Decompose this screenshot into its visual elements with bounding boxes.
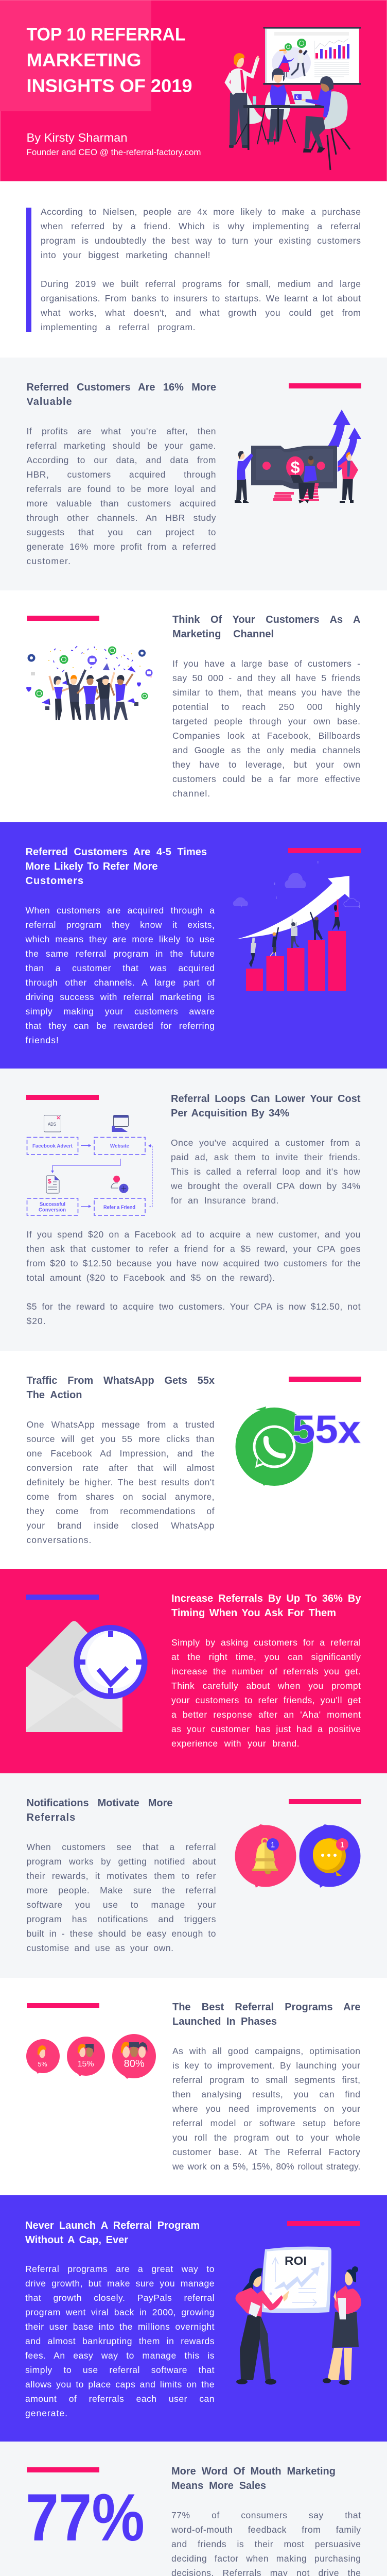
heading	[27, 1798, 173, 1823]
body text: conversations.	[27, 1535, 92, 1545]
body text: experience with your brand.	[171, 1738, 300, 1749]
icon: envelope with clock	[26, 1621, 148, 1732]
body text: referrals are found to be more loyal and	[27, 484, 216, 494]
body text: built in - these should be easy enough to	[27, 1928, 216, 1939]
body text	[27, 1842, 216, 1953]
illustration: team meeting in front of a presentation screen: €	[296, 95, 298, 100]
intro paragraph 2: During 2019 we built referral programs for small, medium and large	[41, 279, 361, 289]
body text: than a customer that was acquired	[26, 963, 215, 973]
heading: More Word Of Mouth Marketing	[171, 2466, 336, 2477]
accent bar	[287, 2221, 360, 2226]
body text: deciding factor when making purchasing	[171, 2553, 361, 2564]
body text: allows you to place caps and limits on the	[25, 2379, 215, 2389]
body text: Simply by asking customers for a referral	[171, 1637, 361, 1648]
body text: through other channels. An HBR study	[27, 513, 216, 523]
body text: you roll the program out to your whole	[172, 2132, 360, 2143]
heading: The Action	[27, 1389, 82, 1401]
stat: 77%: 77%	[26, 2480, 145, 2555]
body text: their user base into the millions overnight	[25, 2321, 215, 2332]
body text: word-of-mouth feedback from family	[171, 2524, 361, 2535]
body text	[25, 2264, 215, 2418]
accent bar	[26, 1595, 99, 1600]
panel: whatsapp 55x	[27, 1375, 361, 1545]
body text: say 50 000 - and they all have 5 friends	[172, 673, 360, 683]
body text	[171, 2510, 361, 2576]
body text: targeted people through your own base.	[172, 716, 360, 726]
chart: rollout phase circles 5% 15% 80%: 80%	[124, 2058, 145, 2070]
panel: 16% more valuable	[0, 358, 387, 590]
panel: launch in phases	[26, 2002, 360, 2172]
heading: The Best Referral Programs Are	[172, 2002, 360, 2013]
body text: If profits are what you're after, then	[27, 426, 216, 436]
worked example text	[27, 1229, 361, 1283]
body text: This is called a referral loop and it's how	[171, 1166, 360, 1177]
heading	[171, 1593, 361, 1619]
body text: As with all good campaigns, optimisation	[172, 2046, 360, 2056]
heading: Think Of Your Customers As A	[172, 614, 360, 625]
heading: Traffic From WhatsApp Gets 55x	[27, 1375, 215, 1386]
worked example text: then ask that customer to refer a friend for a $5 reward, your CPA goes	[27, 1244, 361, 1254]
chart: referral loop flow diagram: Conversion	[39, 1208, 66, 1213]
body text: HBR, customers acquired through	[27, 469, 216, 480]
intro paragraph 2: implementing a referral program.	[41, 322, 196, 332]
heading: Valuable	[27, 396, 73, 408]
body text: Once you've acquired a customer from a	[171, 1138, 360, 1148]
body text: paid ad, ask them to invite their friends.	[171, 1152, 360, 1162]
body text: friends!	[26, 1035, 59, 1045]
conclusion text	[27, 1301, 361, 1326]
chart: referral loop flow diagram: $	[48, 1178, 51, 1185]
body text	[27, 1419, 215, 1545]
body text: One WhatsApp message from a trusted	[27, 1419, 215, 1430]
body text: more valuable than customers acquired	[27, 498, 216, 509]
worked example text: total amount ($20 to Facebook and $5 on the reward).	[27, 1273, 275, 1283]
body text: simply making your customers aware	[26, 1006, 215, 1016]
body text: Referral programs are a great way to	[25, 2264, 215, 2274]
body text: fees. An easy way to manage this is	[25, 2350, 215, 2361]
conclusion text: $20.	[27, 1316, 46, 1326]
accent bar	[27, 2467, 99, 2472]
body text: for an Insurance brand.	[171, 1195, 279, 1206]
body text: a better response after an 'Aha' moment	[171, 1709, 361, 1720]
heading: Timing When You Ask For Them	[171, 1607, 336, 1619]
body text: potential to reach 250 000 highly	[172, 702, 360, 712]
body text: they come from recommendations of	[27, 1506, 215, 1516]
icon: whatsapp brush circle with 55x: 55x	[292, 1408, 361, 1452]
heading	[172, 2002, 360, 2027]
chart: rollout phase circles 5% 15% 80%: 15%	[78, 2060, 94, 2069]
panel: timing	[0, 1569, 387, 1773]
title and byline: By Kirsty Sharman	[27, 131, 128, 144]
intro paragraph 2	[41, 279, 361, 332]
accent bar	[289, 383, 361, 388]
panel: never launch without a cap	[0, 2195, 387, 2442]
body text: and Google as the only media channels	[172, 745, 360, 755]
heading: Launched In Phases	[172, 2016, 277, 2027]
body text: program has notifications and triggers	[27, 1914, 216, 1924]
chart: referral loop flow diagram: Refer a Friend	[103, 1205, 135, 1211]
heading	[27, 1375, 215, 1401]
panel: word of mouth	[0, 2442, 387, 2576]
body text: their rewards, it motivates them to refer	[27, 1871, 216, 1881]
body text: Companies look at Facebook, Billboards	[172, 731, 360, 741]
body text	[26, 905, 215, 1045]
body text: source will get you 55 more clicks than	[27, 1434, 215, 1444]
body text: customise and use as your own.	[27, 1943, 174, 1953]
accent bar	[27, 616, 99, 621]
panel: marketing channel	[26, 614, 360, 799]
body text: more people. Make sure the referral	[27, 1885, 216, 1895]
heading: Referred Customers Are 16% More	[27, 382, 216, 393]
title and byline: TOP 10 REFERRAL	[27, 24, 185, 44]
heading: Increase Referrals By Up To 36% By	[171, 1593, 361, 1604]
heading: Never Launch A Referral Program	[25, 2220, 200, 2231]
illustration: team meeting in front of a presentation screen	[224, 27, 361, 170]
body text: simply to use referral software that	[25, 2365, 215, 2375]
illustration: two women presenting ROI board: ROI	[285, 2254, 307, 2267]
heading: Marketing Channel	[172, 629, 274, 640]
body text: where you need improvements on your	[172, 2104, 360, 2114]
heading: Customers	[26, 875, 84, 887]
body text: we work on a 5%, 15%, 80% rollout strategy.	[172, 2161, 360, 2172]
body text	[172, 658, 360, 799]
chart: referral loop flow diagram: Successful	[40, 1201, 65, 1208]
intro paragraph 1: when referred by a friend. Which is why implementing a referral	[41, 221, 361, 231]
body text: channel.	[172, 788, 210, 799]
chart: rollout phase circles 5% 15% 80%: 5%	[38, 2061, 47, 2068]
body text: as your customer has just had a positive	[171, 1724, 361, 1734]
heading: Without A Cap, Ever	[25, 2234, 128, 2246]
heading: More Likely To Refer More	[26, 861, 157, 872]
accent bar	[289, 1799, 361, 1804]
worked example text: from $20 to $12.50 because you have now acquired two customers for the	[27, 1258, 361, 1268]
accent bar	[289, 1377, 361, 1382]
body text	[27, 426, 216, 566]
body text: and almost bankrupting them in rewards	[25, 2336, 215, 2346]
body text: your customers to refer friends, you'll get	[171, 1695, 361, 1705]
body text: at the right time, you can significantly	[171, 1652, 361, 1662]
chart: referral loop flow diagram	[27, 1115, 152, 1216]
heading	[171, 1093, 360, 1119]
body text: come from shares on social anymore,	[27, 1492, 215, 1502]
icon: notification bell and chat bubble	[235, 1824, 360, 1888]
body text: then analysing results, you can find	[172, 2089, 360, 2099]
body text: referral marketing should be your game.	[27, 440, 216, 451]
body text: amount of referrals each user can	[25, 2394, 215, 2404]
chart: referral loop flow diagram: Website	[110, 1144, 129, 1149]
body text: through other channels. A large part of	[26, 977, 215, 988]
accent bar	[27, 2003, 99, 2008]
body text: customer.	[27, 556, 71, 566]
body text: we brought the overall CPA down by 34%	[171, 1181, 360, 1191]
body text: similar to them, that means you have the	[172, 687, 360, 698]
body text: 77% of consumers say that	[171, 2510, 361, 2520]
body text: and friends is their most persuasive	[171, 2539, 361, 2549]
body text: referral program they know it exists,	[26, 920, 215, 930]
intro paragraph 1: program is undoubtedly the best way to turn your existing customers	[41, 235, 361, 246]
accent bar	[288, 848, 360, 853]
title and byline: INSIGHTS OF 2019	[27, 75, 192, 96]
heading: Referral Loops Can Lower Your Cost	[171, 1093, 360, 1105]
heading: Per Acquisition By 34%	[171, 1108, 289, 1119]
body text: referral program to small segments first,	[172, 2075, 360, 2085]
body text: increase the number of referrals you get.	[171, 1666, 361, 1676]
body text	[171, 1138, 360, 1206]
icon: notification bell and chat bubble: 1	[271, 1840, 275, 1850]
intro paragraph 1: into your biggest marketing channel!	[41, 250, 210, 260]
panel: intro	[26, 207, 361, 332]
heading: Notifications Motivate More	[27, 1798, 173, 1809]
body text	[171, 1637, 361, 1749]
body text: suggests that you can project to	[27, 527, 216, 537]
heading: Referrals	[27, 1812, 76, 1823]
body text: program went viral back in 2000, growing	[25, 2307, 215, 2317]
body text: customers could be a far more effective	[172, 774, 360, 784]
panel: hero header	[0, 0, 387, 181]
accent bar	[26, 1095, 99, 1100]
illustration: money bill with arrows and people: $	[291, 458, 300, 477]
illustration: celebrating crowd with icons	[26, 646, 152, 720]
body text: driving success with referral marketing is	[26, 992, 215, 1002]
body text: definitely be higher. The best results don't	[27, 1477, 215, 1487]
icon: whatsapp brush circle with 55x	[236, 1406, 361, 1486]
body text: generate.	[25, 2408, 68, 2418]
chart: rollout phase circles 5% 15% 80%	[26, 2034, 156, 2079]
heading	[25, 2220, 200, 2246]
body text: is key to improvement. By launching your	[172, 2060, 360, 2071]
body text: When customers are acquired through a	[26, 905, 215, 916]
title and byline: Founder and CEO @ the-referral-factory.com	[27, 148, 201, 157]
title and byline	[27, 24, 201, 157]
body text: one Facebook Ad Impression, and the	[27, 1448, 215, 1459]
heading	[27, 382, 216, 408]
body text: they have to leverage, but your own	[172, 759, 360, 770]
body text: drive growth, but make sure you manage	[25, 2278, 215, 2289]
heading: Referred Customers Are 4-5 Times	[26, 846, 207, 858]
body text: referral model or software setup before	[172, 2118, 360, 2128]
hero lighter square	[0, 1, 151, 111]
body text: that they can be rewarded for referring	[26, 1021, 215, 1031]
panel: 4-5 times more likely	[0, 822, 387, 1069]
intro paragraph 1	[41, 207, 361, 260]
body text	[172, 2046, 360, 2172]
body text: which means they are more likely to use	[26, 934, 215, 944]
heading	[172, 614, 360, 640]
body text: According to our data, and data from	[27, 455, 216, 465]
body text: Think carefully about when you prompt	[171, 1681, 361, 1691]
body text: your brand inside closed WhatsApp	[27, 1520, 215, 1531]
intro paragraph 2: organisations. From banks to insurers to startups. We learnt a lot about	[41, 293, 361, 303]
heading: Means More Sales	[171, 2480, 266, 2492]
panel: referral loops	[0, 1069, 387, 1351]
conclusion text: $5 for the reward to acquire two customers. Your CPA is now $12.50, not	[27, 1301, 361, 1312]
worked example text: If you spend $20 on a Facebook ad to acquire a new customer, and you	[27, 1229, 361, 1240]
illustration: two women presenting ROI board	[236, 2246, 361, 2385]
icon: notification bell and chat bubble: 1	[340, 1840, 344, 1850]
body text: generate 16% more profit from a referred	[27, 541, 216, 552]
illustration: people lifting growth arrow on bars	[233, 861, 360, 991]
title and byline: MARKETING	[27, 49, 141, 70]
panel: notifications	[0, 1773, 387, 1978]
intro paragraph 1: According to Nielsen, people are 4x more likely to make a purchase	[41, 207, 361, 217]
body text: software you use to manage your	[27, 1900, 216, 1910]
body text: program works by getting notified about	[27, 1856, 216, 1867]
body text: that growth closely. PayPals referral	[25, 2293, 215, 2303]
body text: the same referral program in the future	[26, 948, 215, 959]
chart: referral loop flow diagram: ADS	[48, 1122, 56, 1127]
intro paragraph 2: what works, what doesn't, and what growth you could get from	[41, 308, 361, 318]
heading	[26, 846, 207, 887]
heading	[171, 2466, 336, 2492]
body text: If you have a large base of customers -	[172, 658, 360, 669]
body text: conversion rate after that will almost	[27, 1463, 215, 1473]
chart: referral loop flow diagram: Facebook Advert	[32, 1144, 73, 1149]
body text: customer base. At The Referral Factory	[172, 2147, 360, 2157]
body text: When customers see that a referral	[27, 1842, 216, 1852]
illustration: money bill with arrows and people	[235, 410, 361, 503]
intro accent bar	[26, 208, 31, 332]
